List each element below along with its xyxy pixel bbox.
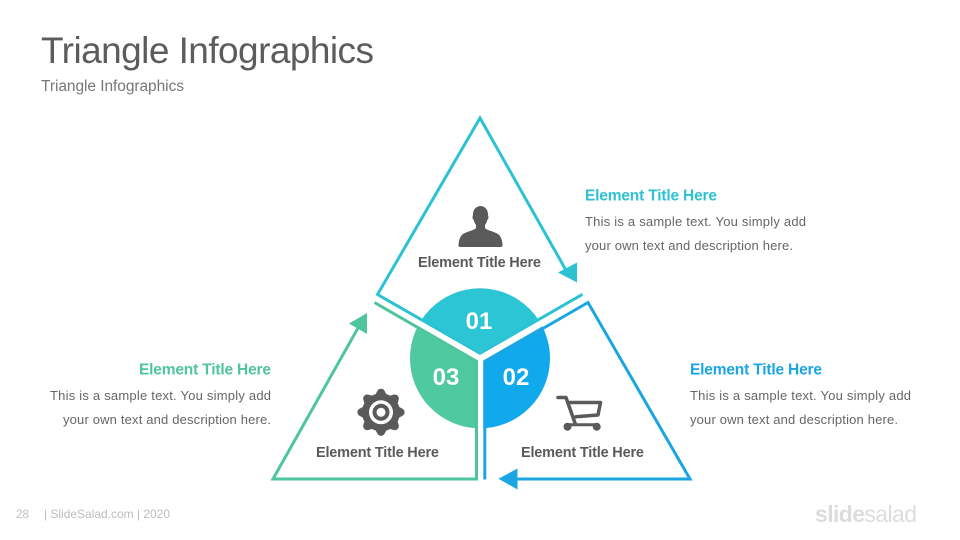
- inner label 01: Element Title Here: [418, 255, 541, 271]
- triangle 02: blue outline with arrow: [485, 302, 690, 490]
- title: Triangle Infographics: [41, 30, 374, 71]
- text block: green: Element Title Here: [139, 362, 271, 378]
- text block: green: your own text and description here.: [63, 412, 271, 427]
- text block: blue: your own text and description here.: [690, 412, 898, 427]
- text block: blue: Element Title Here: [690, 362, 822, 378]
- icon: gear: [357, 389, 405, 436]
- footer text: | SlideSalad.com | 2020: [44, 507, 170, 521]
- number 03: 03: [433, 364, 459, 391]
- text block: teal: your own text and description here.: [585, 238, 793, 253]
- text block: teal: This is a sample text. You simply add: [585, 214, 806, 229]
- triangle 03: green outline with arrow: [273, 302, 476, 479]
- subtitle: Triangle Infographics: [41, 78, 184, 95]
- text block: green: This is a sample text. You simply add: [50, 388, 271, 403]
- number 02: 02: [503, 364, 529, 391]
- inner label 03: Element Title Here: [316, 445, 439, 461]
- icon: shopping cart: [558, 398, 601, 431]
- circle: three colored segments: [410, 288, 550, 428]
- inner label 02: Element Title Here: [521, 445, 644, 461]
- footer page number: 28: [16, 507, 29, 521]
- icon: person: [458, 206, 502, 247]
- number 01: 01: [466, 308, 492, 335]
- text block: teal: Element Title Here: [585, 188, 717, 204]
- text block: green: [50, 362, 271, 427]
- logo: slidesalad: [815, 501, 917, 527]
- text block: teal: [585, 188, 806, 253]
- text block: blue: This is a sample text. You simply add: [690, 388, 911, 403]
- text block: blue: [690, 362, 911, 427]
- triangle 01: teal outline with arrow: [378, 118, 582, 353]
